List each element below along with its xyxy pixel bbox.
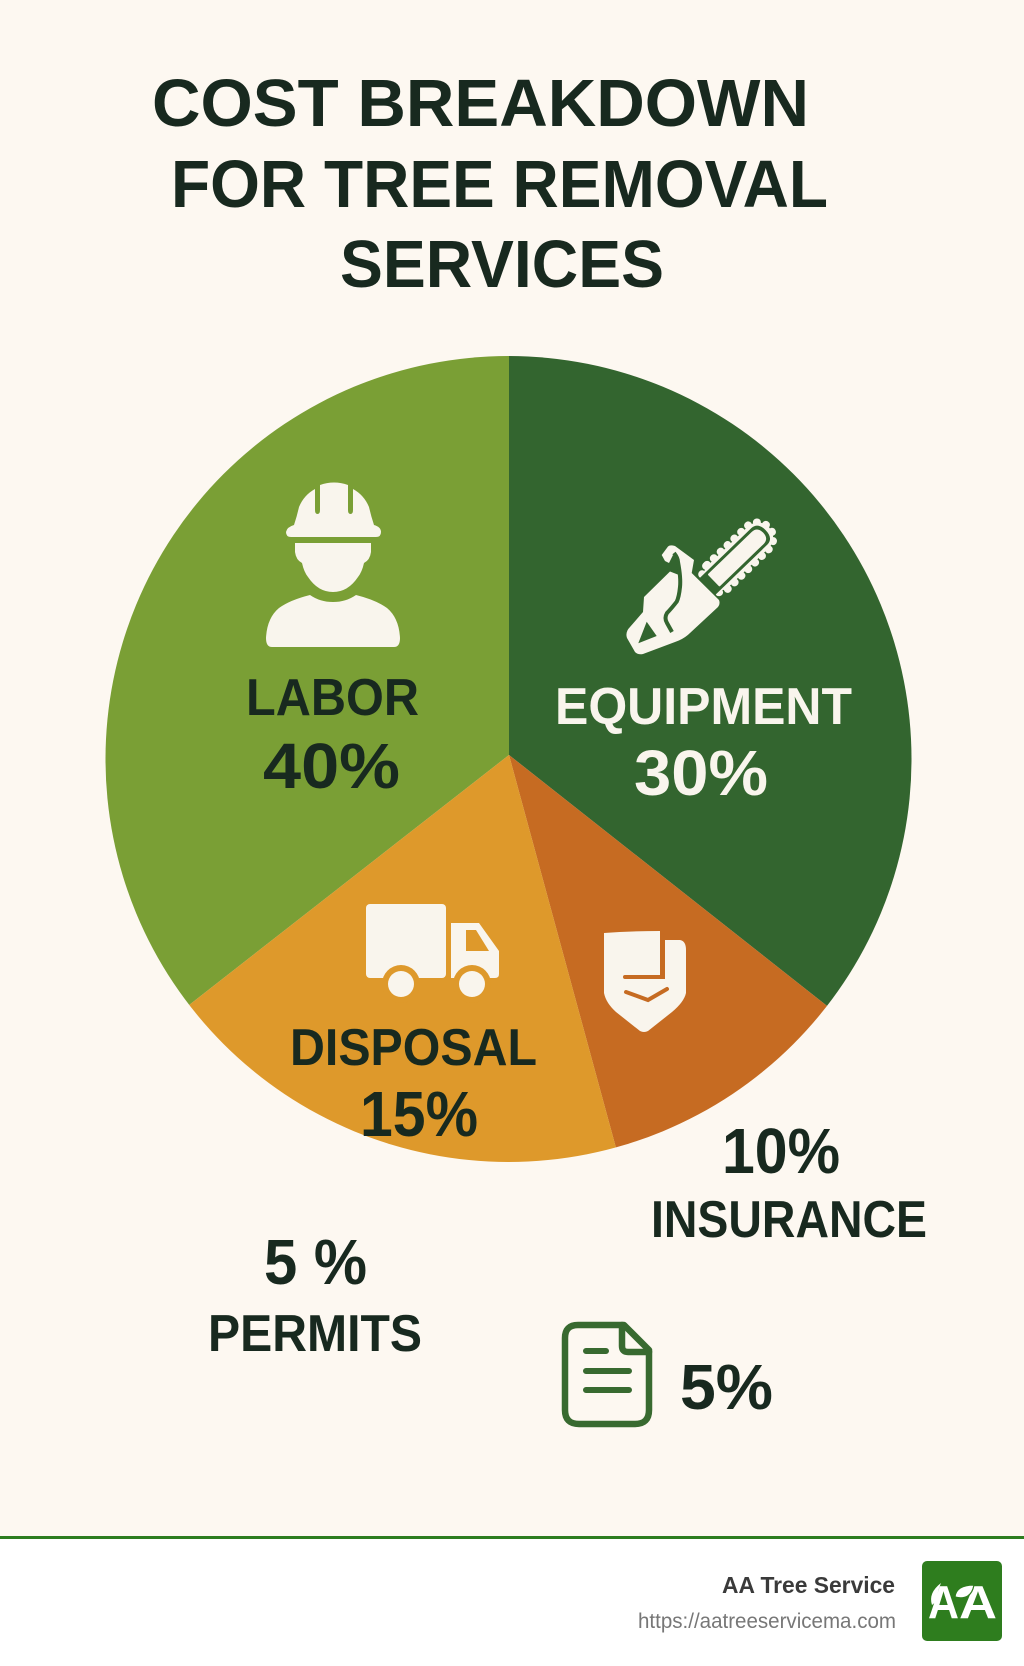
label: permits [208, 1226, 422, 1363]
label: insurance: INSURANCE [651, 1191, 927, 1249]
slice: labor 40% [106, 356, 509, 1005]
label: permits: PERMITS [208, 1305, 422, 1363]
icon: disposal truck [366, 904, 499, 1003]
label: disposal [290, 1019, 537, 1150]
label: disposal: DISPOSAL [290, 1019, 537, 1077]
label: equipment: EQUIPMENT [555, 678, 852, 736]
label: labor: LABOR [246, 669, 419, 727]
footer brand text [638, 1572, 896, 1633]
label: labor [246, 669, 419, 802]
slice: equipment 30% [509, 356, 912, 1006]
logo: A [959, 1576, 997, 1628]
label: insurance: 10% [722, 1115, 840, 1187]
title: FOR TREE REMOVAL [171, 147, 828, 222]
label: equipment [555, 678, 852, 809]
label: insurance [651, 1115, 927, 1249]
title: SERVICES [340, 227, 664, 302]
label: permits: 5 % [264, 1226, 367, 1298]
title: COST BREAKDOWN [152, 66, 809, 141]
logo [922, 1561, 1002, 1641]
slice: disposal 15% [189, 755, 616, 1162]
label: equipment: 30% [634, 737, 768, 809]
footer divider [0, 1536, 1024, 1539]
icon: worker with hard hat [266, 482, 400, 647]
title [152, 66, 828, 302]
icon: permit document [565, 1325, 649, 1424]
icon: chainsaw [626, 516, 780, 654]
footer brand text: AA Tree Service [722, 1572, 895, 1598]
label: labor: 40% [263, 730, 400, 802]
pie chart [106, 356, 912, 1162]
label: disposal: 15% [360, 1078, 478, 1150]
slice: insurance 10% [509, 755, 827, 1148]
logo: A [928, 1576, 959, 1628]
label: permits percentage: 5% [680, 1351, 773, 1423]
icon: insurance shield [604, 931, 686, 1032]
footer brand text: https://aatreeservicema.com [638, 1610, 896, 1633]
